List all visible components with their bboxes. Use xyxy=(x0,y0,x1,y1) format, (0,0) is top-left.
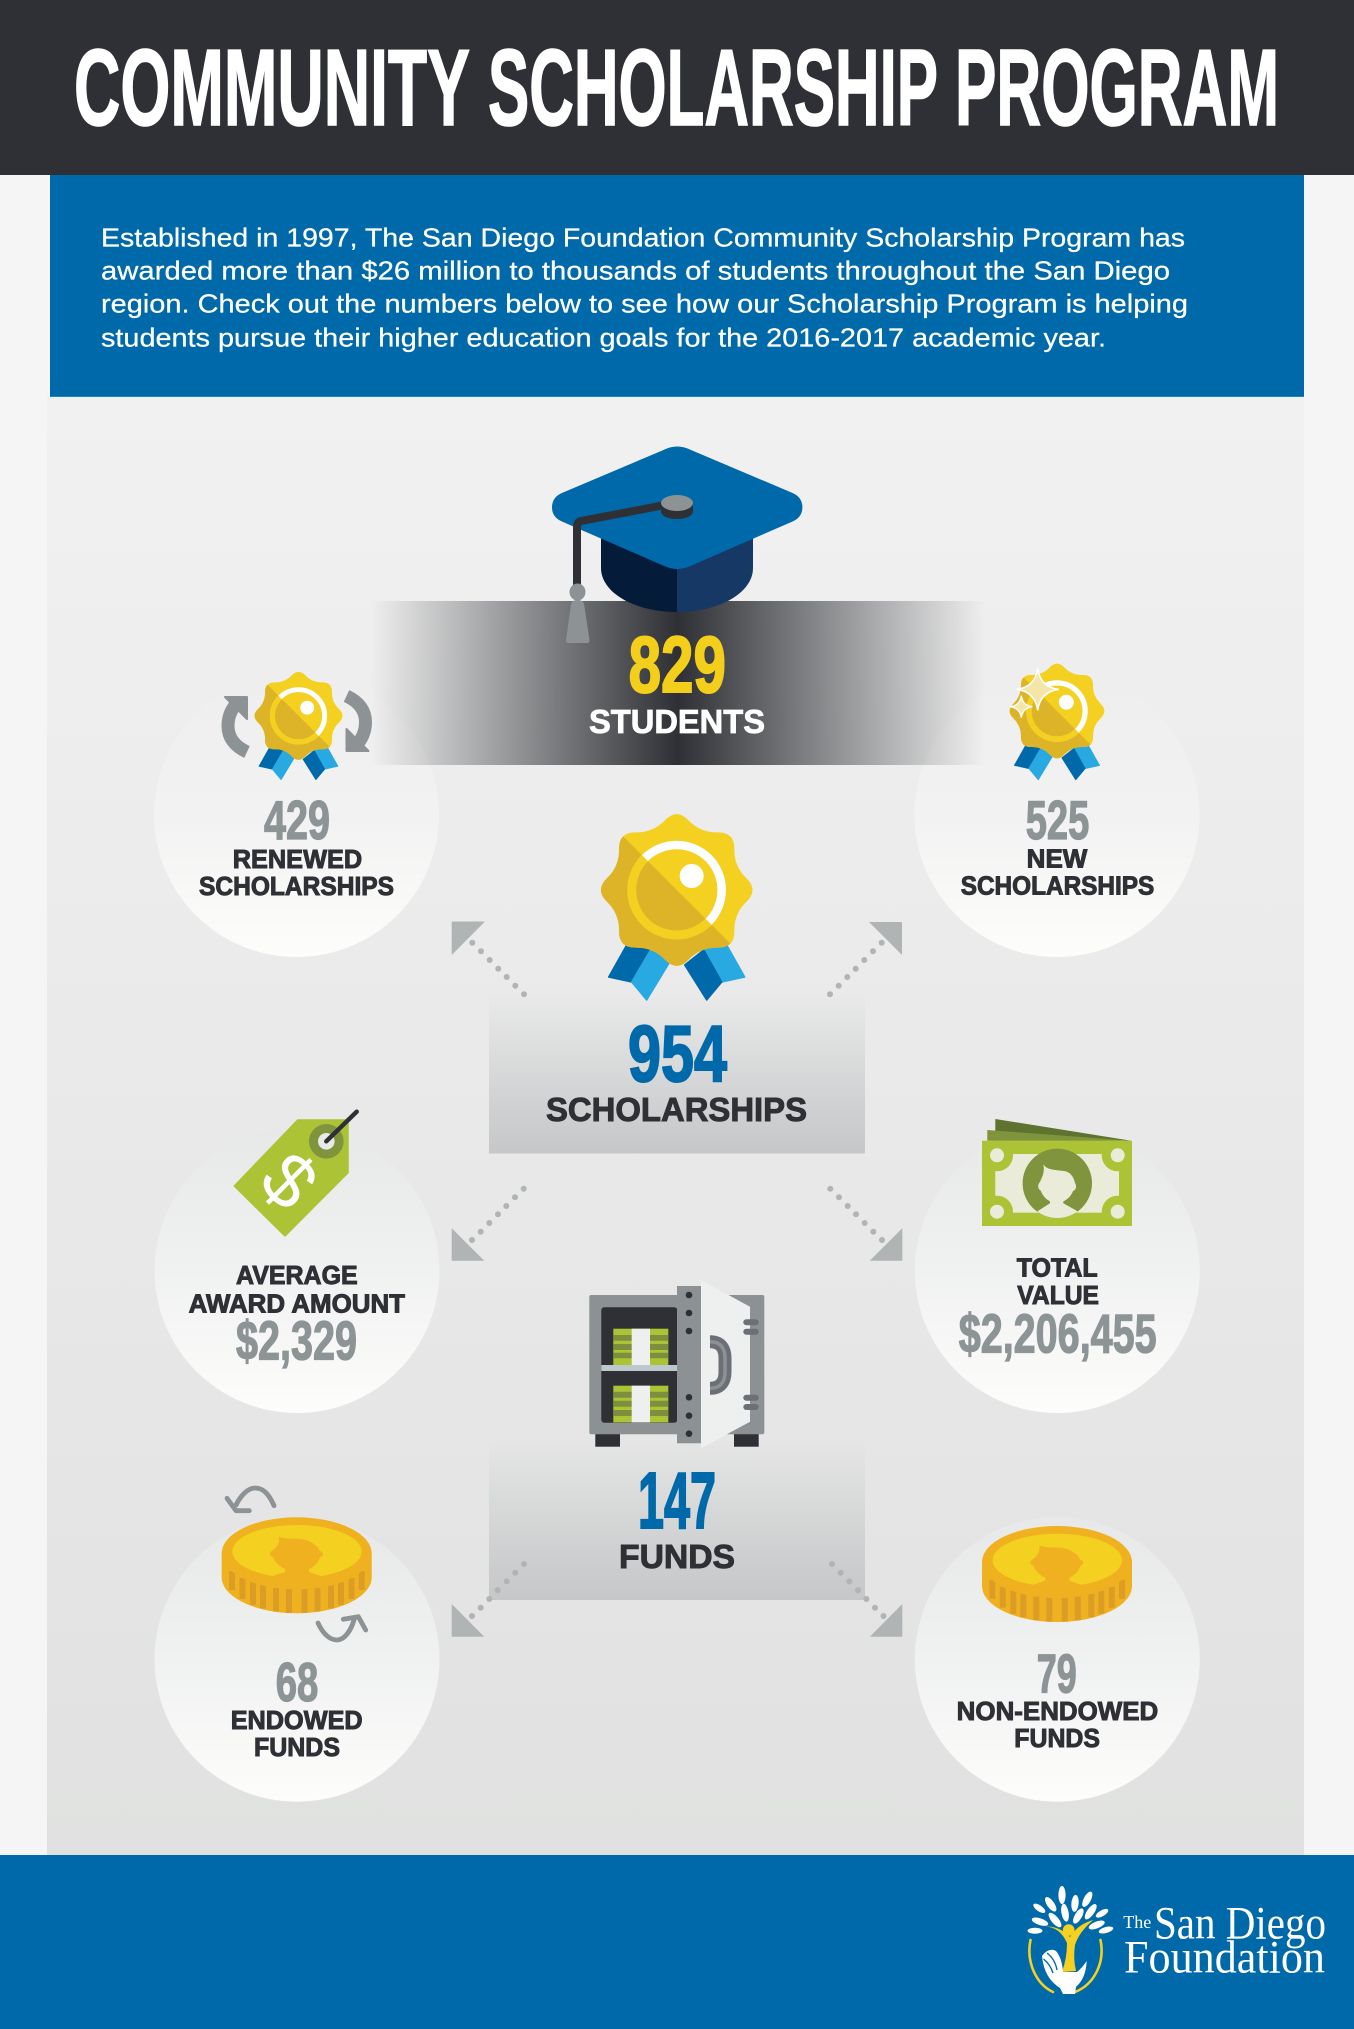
panel: non-endowed funds: FUNDS xyxy=(1014,1725,1100,1753)
panel: 829 students band: STUDENTS xyxy=(589,703,765,740)
arrow: to total value xyxy=(827,1186,902,1261)
panel: non-endowed funds: NON-ENDOWED xyxy=(957,1698,1158,1726)
panel: non-endowed funds: 79 xyxy=(1037,1642,1077,1704)
panel: intro text block: awarded more than $26 million to thousands of students throughout the San Diego xyxy=(101,256,1170,286)
icon: price tag xyxy=(234,1112,357,1236)
panel: intro text block xyxy=(50,175,1304,397)
icon: safe xyxy=(589,1280,764,1448)
arrow: to renewed scholarships xyxy=(452,922,527,997)
panel: intro text block: Established in 1997, The San Diego Foundation Community Scholarship Program has xyxy=(101,222,1185,252)
logo: San Diego Foundation xyxy=(1028,1886,1326,1994)
panel: total value: TOTAL xyxy=(1017,1255,1098,1283)
panel: total value: VALUE xyxy=(1017,1282,1099,1310)
icon: new scholarship medal with sparkles xyxy=(1010,664,1104,780)
panel: new scholarships: SCHOLARSHIPS xyxy=(961,872,1154,900)
panel: new scholarships: 525 xyxy=(1026,789,1089,851)
panel: 954 scholarships xyxy=(489,990,865,1154)
panel: endowed funds xyxy=(154,1517,440,1802)
icon: graduation cap xyxy=(552,446,802,643)
panel: endowed funds: ENDOWED xyxy=(231,1707,363,1735)
panel: renewed scholarships: SCHOLARSHIPS xyxy=(199,873,394,901)
logo: San Diego Foundation: Foundation xyxy=(1124,1932,1325,1984)
icon: large medal xyxy=(601,814,753,1000)
panel: 147 funds: 147 xyxy=(638,1456,716,1545)
arrow: to non-endowed funds xyxy=(829,1561,902,1637)
icon: renewed scholarship medal with arrows xyxy=(225,672,368,780)
panel: 954 scholarships: SCHOLARSHIPS xyxy=(546,1091,807,1128)
footer band with logo xyxy=(0,1855,1354,2029)
panel: intro text block: students pursue their higher education goals for the 2016-2017 academic year. xyxy=(101,322,1106,352)
icon: non-endowed coin xyxy=(982,1526,1132,1622)
main gray panel xyxy=(47,397,1304,1855)
panel: average award amount xyxy=(154,1128,440,1413)
header: title bar xyxy=(0,0,1354,175)
panel: intro text block: region. Check out the numbers below to see how our Scholarship Program is helping xyxy=(101,288,1188,318)
panel: new scholarships: NEW xyxy=(1027,845,1088,873)
panel: total value: $2,206,455 xyxy=(959,1302,1157,1364)
panel: endowed funds: 68 xyxy=(276,1651,318,1713)
panel: renewed scholarships xyxy=(154,672,439,957)
arrow: to average award xyxy=(452,1186,527,1261)
panel: non-endowed funds xyxy=(915,1517,1200,1802)
panel: average award amount: AVERAGE xyxy=(236,1262,358,1290)
panel: renewed scholarships: RENEWED xyxy=(233,846,362,874)
header: title bar: SCHOLARSHIP xyxy=(488,27,938,149)
icon: banknotes xyxy=(981,1119,1134,1230)
panel: renewed scholarships: 429 xyxy=(264,789,330,851)
panel: 147 funds xyxy=(489,1440,865,1600)
icon: price tag: $ xyxy=(244,1136,334,1226)
panel: average award amount: $2,329 xyxy=(236,1309,357,1371)
panel: endowed funds: FUNDS xyxy=(254,1734,340,1762)
icon: endowed coin with rotation arrows xyxy=(222,1488,372,1640)
logo: San Diego Foundation: San Diego xyxy=(1154,1897,1326,1949)
panel: 829 students band xyxy=(371,601,985,765)
panel: 147 funds: FUNDS xyxy=(619,1538,735,1575)
panel: 954 scholarships: 954 xyxy=(628,1009,727,1098)
panel: total value xyxy=(915,1128,1200,1413)
logo: San Diego Foundation: The xyxy=(1123,1912,1151,1932)
arrow: to new scholarships xyxy=(827,922,902,997)
panel: 829 students band: 829 xyxy=(629,620,726,709)
panel: new scholarships xyxy=(914,672,1200,957)
arrow: to endowed funds xyxy=(452,1561,527,1637)
header: title bar: COMMUNITY xyxy=(74,27,470,149)
panel: average award amount: AWARD AMOUNT xyxy=(189,1290,405,1318)
